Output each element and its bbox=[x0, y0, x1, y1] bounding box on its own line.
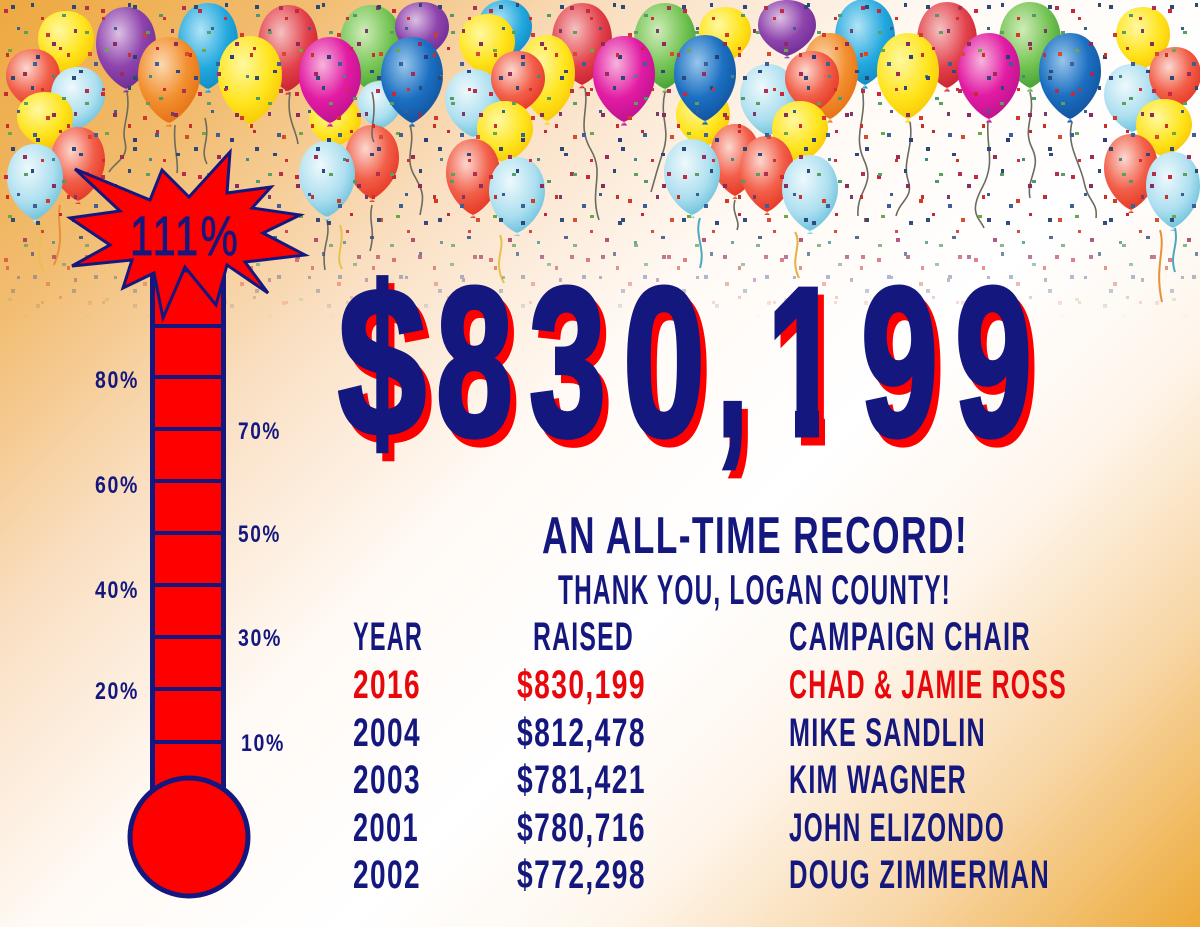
row 2001: JOHN ELIZONDO bbox=[789, 806, 1005, 850]
row 2002: 2002 bbox=[353, 853, 421, 897]
amount face: 9 bbox=[861, 243, 938, 480]
row 2003: 2003 bbox=[353, 758, 421, 802]
row 2001: $780,716 bbox=[517, 806, 646, 850]
amount shadow: $ bbox=[344, 251, 432, 488]
amount shadow: , bbox=[723, 251, 754, 488]
balloon ribbons bbox=[109, 88, 1096, 270]
row 2002 bbox=[353, 853, 1050, 897]
row 2016: 2016 bbox=[353, 663, 421, 707]
balloons: front row bbox=[7, 92, 1200, 236]
thermometer bulb bbox=[130, 778, 248, 896]
amount face bbox=[338, 275, 1028, 470]
amount face: , bbox=[717, 243, 748, 480]
thermometer bbox=[130, 270, 248, 896]
headline: AN ALL-TIME RECORD! bbox=[542, 507, 968, 565]
balloons: middle row bbox=[6, 14, 1200, 159]
amount shadow bbox=[351, 283, 1034, 478]
percent labels: 40% bbox=[95, 577, 139, 604]
row 2002: DOUG ZIMMERMAN bbox=[789, 853, 1050, 897]
amount shadow: 9 bbox=[961, 251, 1038, 488]
percent labels: 50% bbox=[238, 521, 281, 548]
table header: CAMPAIGN CHAIR bbox=[789, 615, 1031, 659]
table header bbox=[353, 615, 1031, 659]
amount face: 9 bbox=[955, 243, 1032, 480]
amount shadow: 1 bbox=[773, 251, 847, 488]
percent labels: 60% bbox=[95, 472, 139, 499]
row 2001 bbox=[353, 806, 1005, 850]
row 2003: $781,421 bbox=[517, 758, 646, 802]
amount shadow: 9 bbox=[867, 251, 944, 488]
percent labels: 70% bbox=[238, 418, 281, 445]
table header: YEAR bbox=[353, 615, 423, 659]
row 2004: MIKE SANDLIN bbox=[789, 711, 986, 755]
row 2004: $812,478 bbox=[517, 711, 646, 755]
ribbons: colored bbox=[39, 205, 1176, 302]
balloons: back row bbox=[38, 0, 1170, 150]
thermometer scale lines bbox=[152, 326, 224, 742]
amount face: $ bbox=[338, 243, 426, 480]
row 2004: 2004 bbox=[353, 711, 421, 755]
headline and subheadline bbox=[542, 507, 968, 613]
percent labels: 10% bbox=[241, 730, 285, 757]
amount shadow: 3 bbox=[535, 251, 612, 488]
starburst badge bbox=[70, 152, 305, 318]
percent labels bbox=[95, 367, 285, 757]
amount face: 0 bbox=[623, 243, 705, 480]
row 2016: $830,199 bbox=[517, 663, 646, 707]
amount face: 8 bbox=[436, 243, 513, 480]
percent labels: 30% bbox=[238, 625, 282, 652]
row 2004 bbox=[353, 711, 986, 755]
total amount bbox=[338, 275, 1034, 478]
row 2003: KIM WAGNER bbox=[789, 758, 967, 802]
badge percentage: 111% bbox=[130, 204, 240, 267]
table header: RAISED bbox=[533, 615, 634, 659]
row 2003 bbox=[353, 758, 967, 802]
confetti bbox=[0, 0, 1200, 320]
percent labels: 80% bbox=[95, 367, 139, 394]
row 2001: 2001 bbox=[353, 806, 419, 850]
thermometer tube bbox=[152, 270, 224, 795]
row 2002: $772,298 bbox=[517, 853, 646, 897]
amount shadow: 0 bbox=[629, 251, 711, 488]
row 2016 bbox=[353, 663, 1067, 707]
records table bbox=[353, 615, 1067, 897]
amount shadow: 8 bbox=[442, 251, 519, 488]
amount face: 1 bbox=[767, 243, 841, 480]
percent labels: 20% bbox=[95, 678, 139, 705]
amount face: 3 bbox=[529, 243, 606, 480]
